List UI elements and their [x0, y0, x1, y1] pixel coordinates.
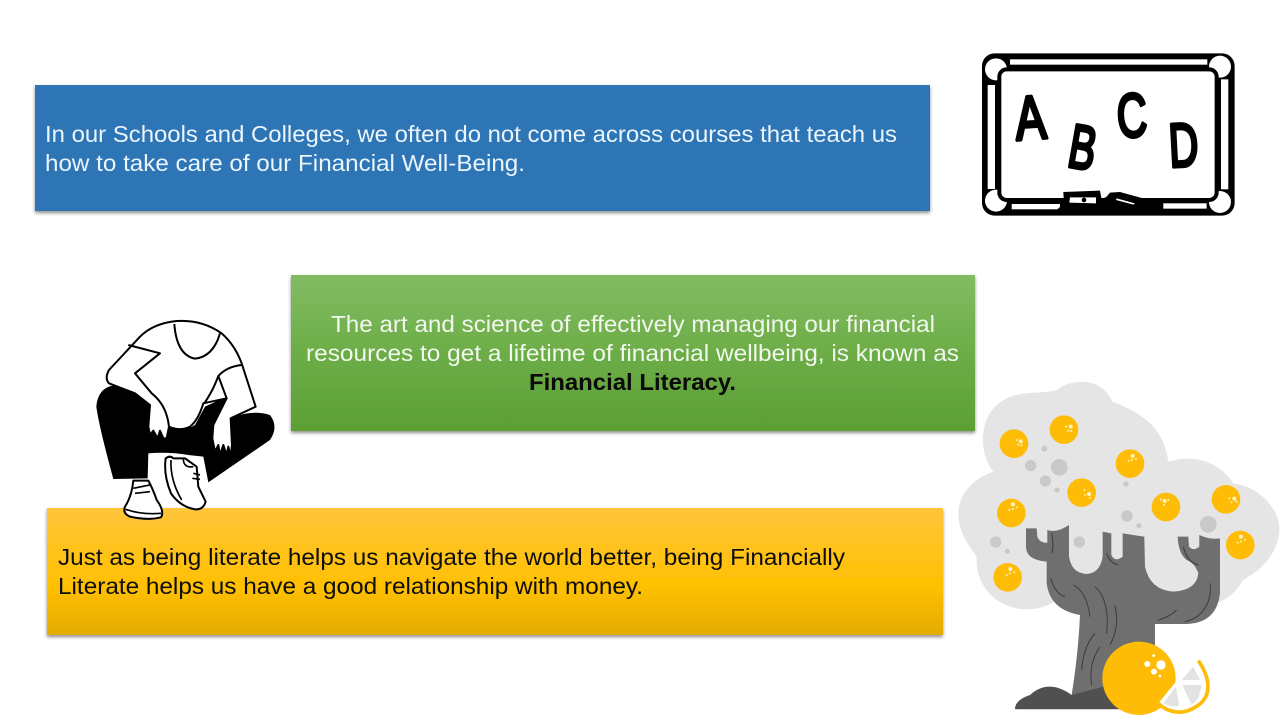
board letters: B [1064, 112, 1102, 184]
text: schools and colleges: In our Schools and Colleges, we often do not come across courses that teach us [45, 121, 897, 147]
icon: person crouching without a head [96, 321, 274, 519]
text: definition: Financial Literacy. [529, 369, 736, 395]
text: relationship with money [58, 544, 846, 599]
text: relationship with money: Literate helps us have a good relationship with money. [58, 573, 643, 599]
large orange [1102, 642, 1176, 715]
large orange highlights [1144, 654, 1166, 677]
panel: definition of financial literacy [291, 275, 975, 431]
right shoe [165, 457, 206, 509]
text: relationship with money: Just as being literate helps us navigate the world better, being Financially [58, 544, 846, 570]
eraser and marker tray [1056, 191, 1164, 213]
trousers [96, 385, 274, 482]
oranges on the tree [993, 415, 1255, 592]
panel: schools and colleges [35, 85, 930, 211]
text: schools and colleges: how to take care of our Financial Well-Being. [45, 150, 525, 176]
canopy shadow spots [990, 446, 1217, 554]
shirt details [128, 324, 242, 427]
shirt, arms and hands [107, 321, 256, 457]
panel: being financially literate [47, 508, 943, 635]
icon: chalkboard with ABCD [982, 53, 1235, 216]
orange slice [1158, 661, 1208, 712]
board letters: C [1115, 81, 1149, 151]
board letters: A [1013, 83, 1048, 154]
board letters: D [1167, 111, 1200, 181]
left shoe [124, 481, 162, 519]
tree trunk [1026, 525, 1220, 695]
text: definition: The art and science of effectively managing our financial [331, 311, 935, 337]
bark lines [1051, 533, 1210, 685]
tree canopy [958, 382, 1279, 609]
text: definition [306, 311, 959, 395]
text: schools and colleges [45, 121, 897, 176]
orange highlights [1006, 425, 1246, 576]
icon: orange tree [958, 382, 1279, 715]
text: definition: resources to get a lifetime of financial wellbeing, is known as [306, 340, 959, 366]
ground mound [1015, 687, 1123, 709]
board letters [1013, 81, 1200, 184]
